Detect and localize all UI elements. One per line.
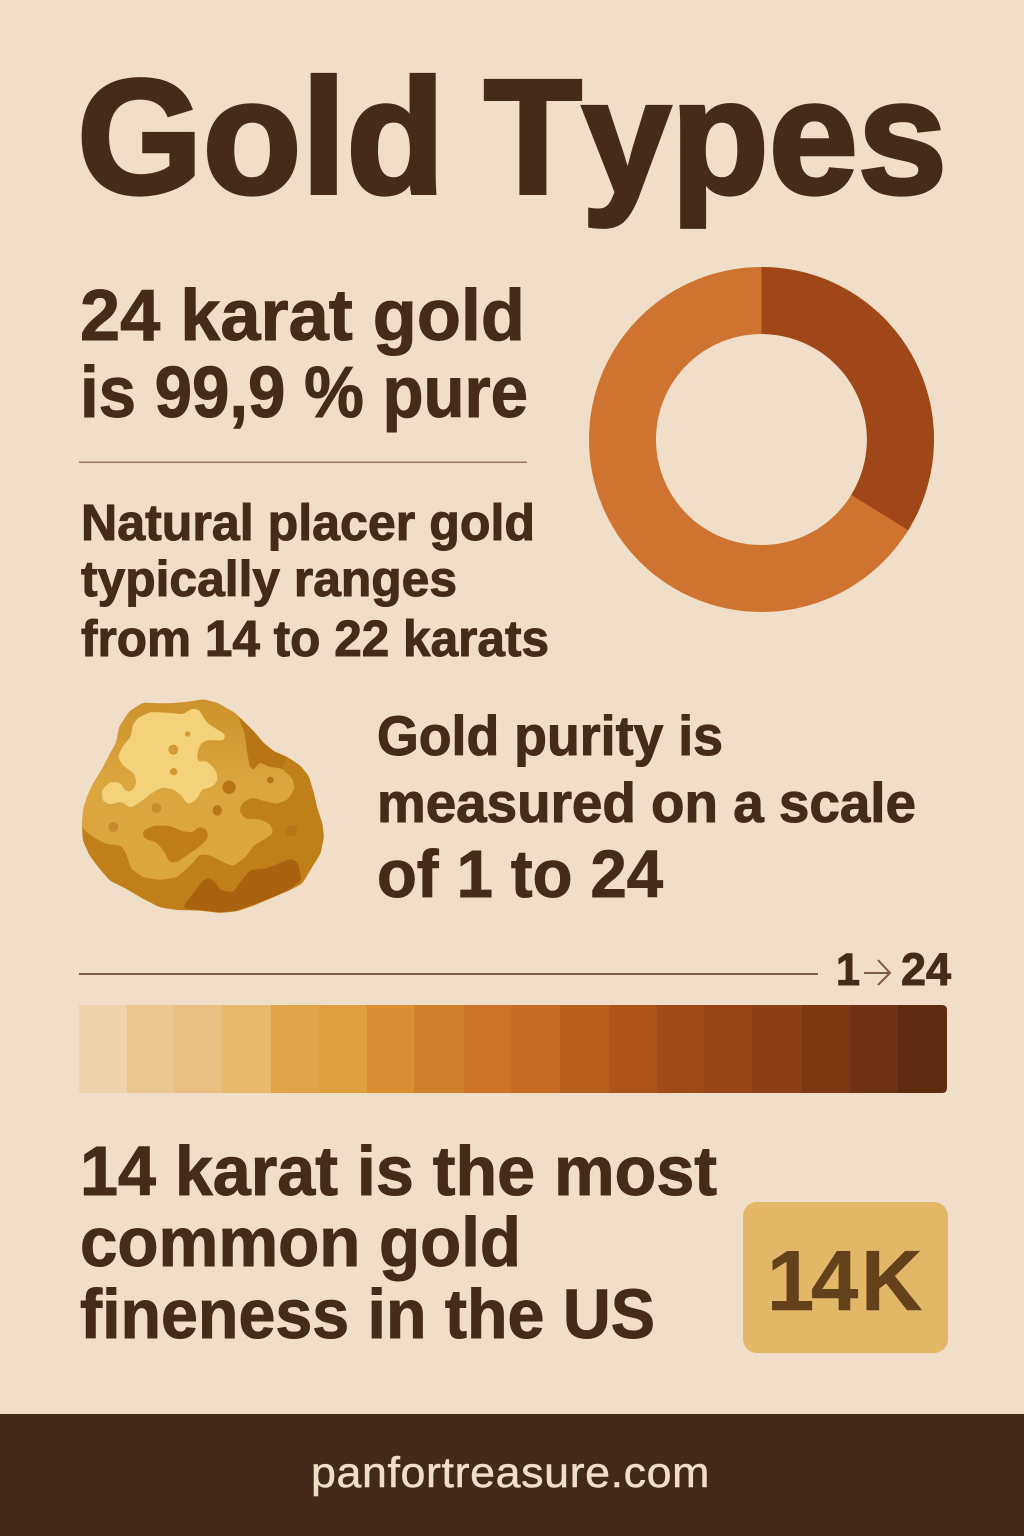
text block: purity scale: Gold purity is [377,704,723,767]
text block: natural placer gold [81,494,549,667]
text block: natural placer gold: from 14 to 22 karats [81,610,549,667]
icon: gold nugget [83,700,323,912]
badge: 14K: 14K [767,1234,922,1329]
text block: 14 karat common fineness [80,1132,717,1353]
footer: panfortreasure.com [311,1449,710,1497]
text block: natural placer gold: Natural placer gold [81,494,535,551]
text block: 24 karat purity: 24 karat gold [80,276,525,356]
text block: purity scale [377,704,916,912]
text block: purity scale: measured on a scale [377,771,916,834]
text block: 24 karat purity: is 99,9 % pure [80,353,528,433]
scale label: 1 to 24: 24 [901,944,951,995]
scale label: 1 to 24 [836,944,951,995]
scale label: 1 to 24: 1 [836,944,860,995]
text block: 14 karat common fineness: common gold [80,1203,521,1281]
title [77,45,947,228]
text block: 24 karat purity [80,276,528,433]
text block: 14 karat common fineness: 14 karat is the most [80,1132,717,1210]
text block: natural placer gold: typically ranges [81,551,457,607]
badge: 14K [743,1202,948,1353]
donut chart [622,267,934,578]
text block: 14 karat common fineness: fineness in the US [80,1275,655,1353]
text block: purity scale: of 1 to 24 [377,837,663,912]
title: Gold [77,45,445,228]
footer [0,1414,1024,1536]
icon: arrow [864,960,890,985]
title: Types [484,45,947,228]
karat colour scale bar [79,1005,947,1093]
